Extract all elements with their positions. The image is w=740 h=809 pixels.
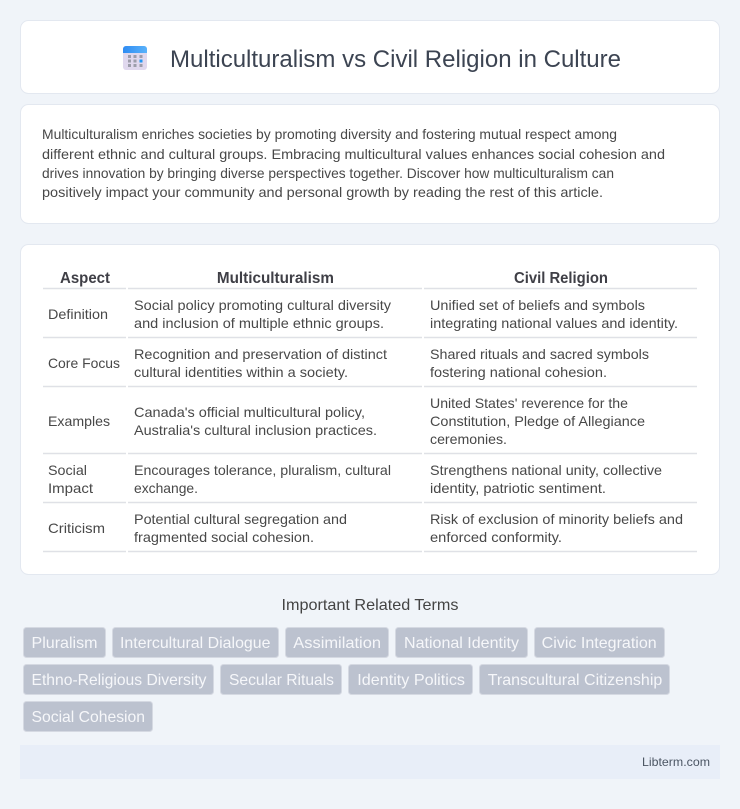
row: Criticism: Risk of exclusion of minority beliefs and (430, 511, 683, 527)
tag: National Identity: National Identity (404, 635, 519, 652)
row: Core Focus: Shared rituals and sacred symbols (430, 346, 649, 362)
row: Definition (48, 297, 678, 331)
tag: Intercultural Dialogue: Intercultural Dialogue (120, 635, 271, 652)
row: Criticism: enforced conformity. (430, 529, 562, 545)
tag: Identity Politics (348, 664, 472, 694)
related terms heading: Important Related Terms (282, 597, 458, 614)
row: Examples: Australia's cultural inclusion practices. (134, 422, 377, 438)
row: Examples: Canada's official multicultural policy, (134, 404, 365, 420)
row: Examples: ceremonies. (430, 431, 507, 447)
row: Social Impact: Strengthens national unity, collective (430, 462, 662, 478)
row: Social Impact (48, 462, 662, 496)
row: Definition: Social policy promoting cultural diversity (134, 297, 391, 313)
intro paragraph: drives innovation by bringing diverse perspectives together. Discover how multiculturalism can (42, 165, 614, 181)
row: Criticism: Criticism (48, 520, 105, 536)
row: Definition: Unified set of beliefs and symbols (430, 297, 645, 313)
tag: National Identity (396, 628, 528, 658)
row: Definition: and inclusion of multiple ethnic groups. (134, 315, 384, 331)
table header: Civil Religion (514, 270, 608, 287)
row: Examples (48, 395, 645, 447)
row: Social Impact: identity, patriotic sentiment. (430, 480, 606, 496)
row: Criticism: fragmented social cohesion. (134, 529, 314, 545)
footer bar (20, 745, 720, 779)
row: Core Focus: cultural identities within a society. (134, 364, 348, 380)
row: Core Focus: Recognition and preservation of distinct (134, 346, 387, 362)
intro panel (20, 104, 720, 224)
tag cloud (24, 628, 670, 732)
footer credit: Libterm.com (642, 755, 710, 769)
row: Definition: integrating national values and identity. (430, 315, 678, 331)
tag: Pluralism: Pluralism (32, 635, 98, 652)
table header: Multiculturalism (217, 270, 334, 287)
table header: Aspect (60, 270, 111, 287)
intro paragraph: different ethnic and cultural groups. Embracing multicultural values enhances social cohesion and (42, 146, 665, 162)
tag: Pluralism (24, 628, 106, 658)
intro paragraph (42, 126, 665, 200)
row: Social Impact: Social (48, 462, 87, 478)
header panel (20, 20, 720, 94)
comparison table panel (20, 244, 720, 574)
row: Social Impact: Impact (48, 480, 93, 496)
tag: Assimilation (286, 628, 388, 658)
tag: Social Cohesion (24, 702, 152, 732)
icon: calendar (123, 46, 147, 70)
row: Definition: Definition (48, 306, 108, 322)
tag: Social Cohesion: Social Cohesion (32, 709, 145, 726)
tag: Civic Integration (534, 628, 664, 658)
tag: Secular Rituals: Secular Rituals (229, 672, 334, 689)
intro paragraph: Multiculturalism enriches societies by promoting diversity and fostering mutual respect among (42, 126, 617, 142)
row: Core Focus: fostering national cohesion. (430, 364, 607, 380)
tag: Ethno-Religious Diversity (24, 664, 214, 694)
tag: Secular Rituals (220, 664, 342, 694)
tag: Assimilation: Assimilation (293, 635, 381, 652)
intro paragraph: positively impact your community and personal growth by reading the rest of this article. (42, 184, 603, 200)
tag: Intercultural Dialogue (112, 628, 278, 658)
row: Criticism: Potential cultural segregation and (134, 511, 347, 527)
tag: Ethno-Religious Diversity: Ethno-Religious Diversity (32, 672, 206, 689)
title: Multiculturalism vs Civil Religion in Culture (170, 46, 621, 73)
tag: Civic Integration: Civic Integration (542, 635, 657, 652)
row: Criticism (48, 511, 683, 545)
table header (60, 270, 608, 287)
row: Examples: Examples (48, 413, 110, 429)
row: Examples: Constitution, Pledge of Allegiance (430, 413, 645, 429)
tag: Identity Politics: Identity Politics (357, 672, 465, 689)
tag: Transcultural Citizenship (480, 664, 670, 694)
row: Social Impact: Encourages tolerance, pluralism, cultural (134, 462, 391, 478)
row: Core Focus: Core Focus (48, 355, 120, 371)
row: Examples: United States' reverence for the (430, 395, 628, 411)
row: Social Impact: exchange. (134, 480, 198, 496)
row: Core Focus (48, 346, 649, 380)
tag: Transcultural Citizenship: Transcultural Citizenship (488, 672, 662, 689)
